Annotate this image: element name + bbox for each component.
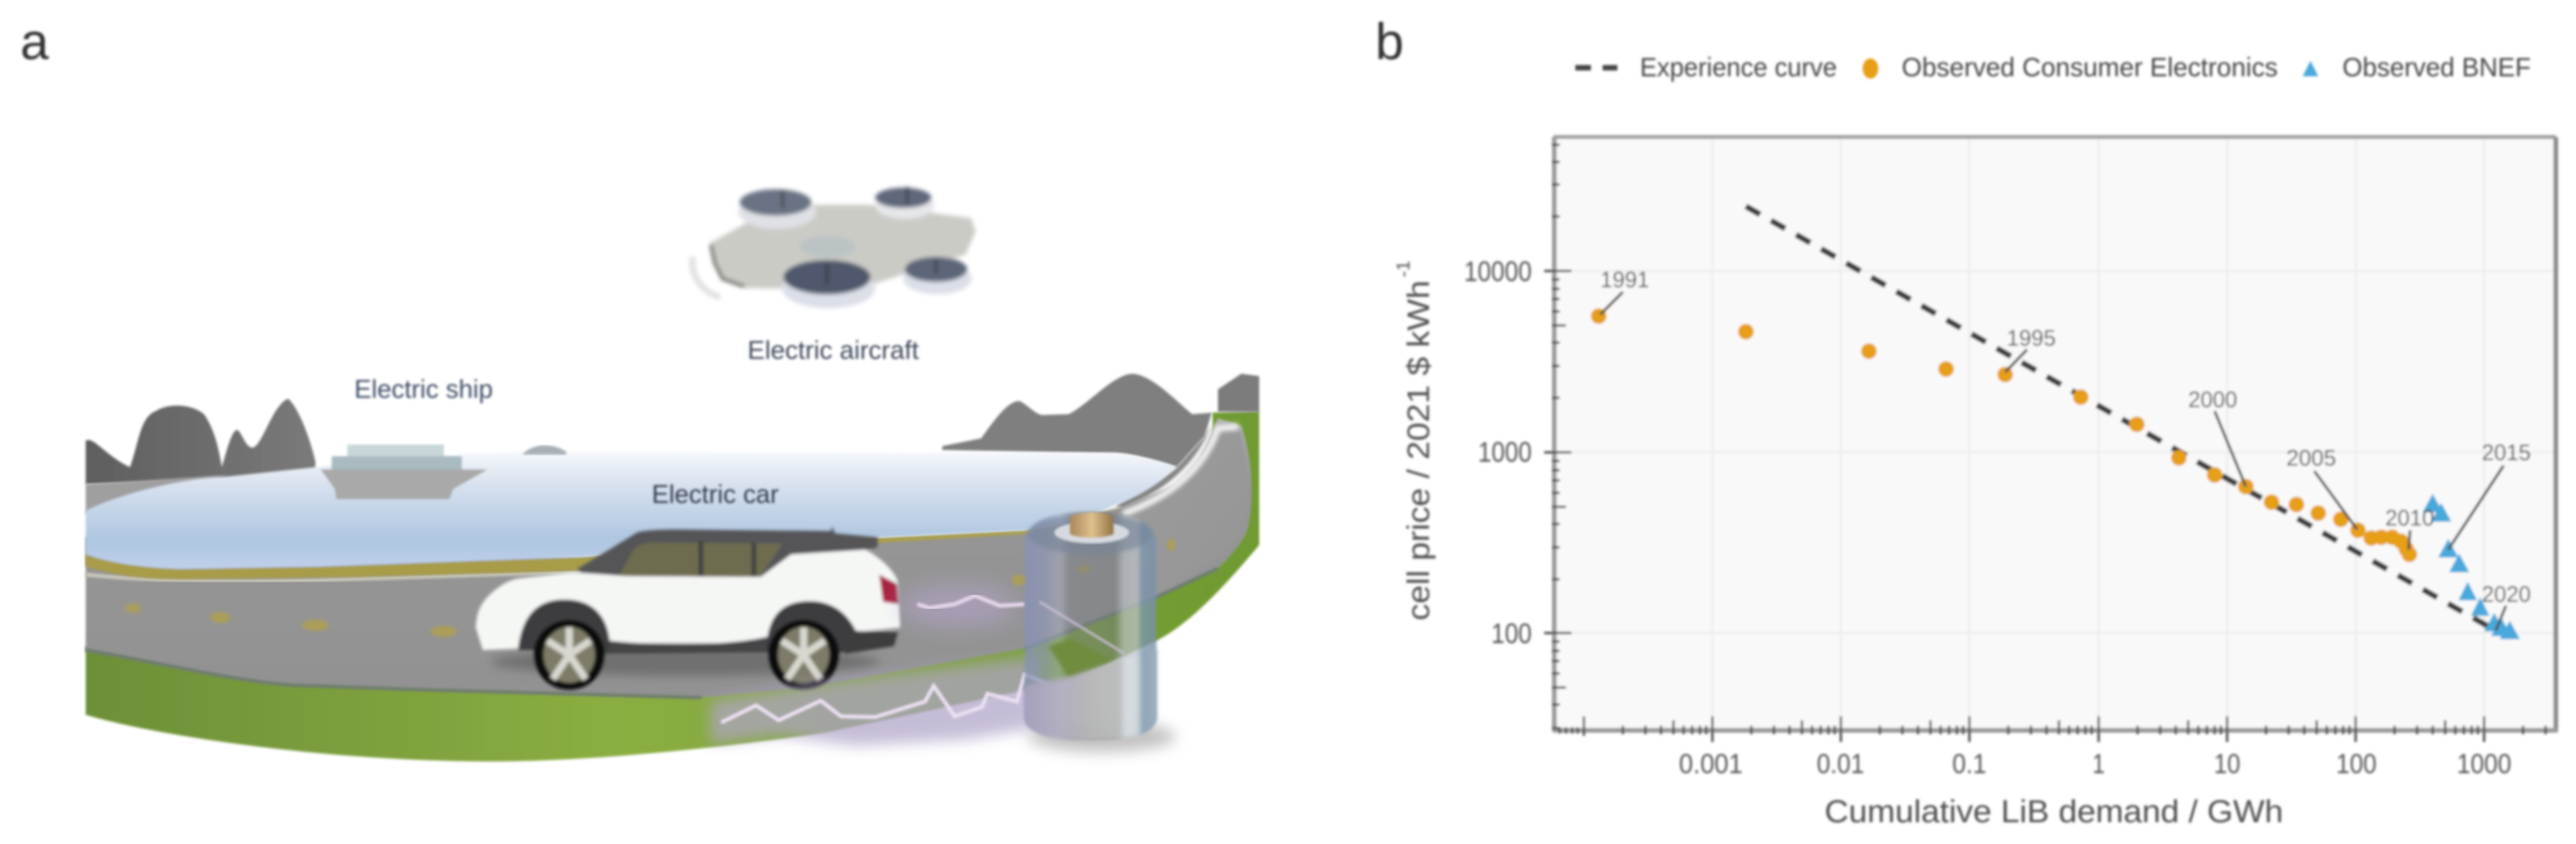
panel a: electric transport scene (86, 187, 1259, 761)
label: electric car: Electric car (652, 480, 779, 508)
internal spark line (1040, 602, 1125, 654)
rotors (738, 187, 972, 308)
battery cell (1025, 512, 1176, 752)
label: electric ship: Electric ship (354, 375, 493, 403)
year annotations: 2015 (2482, 441, 2531, 466)
tail light (879, 575, 899, 604)
battery terminal (1070, 512, 1114, 537)
legend (1575, 53, 2531, 83)
car roof (577, 526, 878, 580)
road (86, 418, 1251, 698)
wheel arches (518, 600, 610, 650)
year annotations (1600, 268, 2531, 631)
road far left edge (86, 475, 227, 514)
car body (476, 550, 900, 650)
x axis tick labels: 10 (2214, 749, 2240, 779)
y axis tick labels: 1000 (1478, 436, 1532, 468)
x axis tick labels: 1 (2092, 749, 2105, 779)
x axis tick labels: 1000 (2457, 749, 2511, 779)
front wheel (533, 620, 605, 690)
cabin (800, 236, 856, 258)
car windows (619, 543, 783, 578)
y axis tick labels: 10000 (1464, 255, 1532, 287)
car shadow (491, 648, 880, 676)
y axis tick labels (1464, 255, 1532, 649)
x axis title: Cumulative LiB demand / GWh (1825, 793, 2283, 829)
x axis tick labels (1679, 749, 2511, 779)
x axis tick labels: 100 (2336, 749, 2377, 779)
plot frame (1554, 137, 2557, 732)
lightning glow (710, 584, 1036, 746)
aircraft body (710, 205, 976, 290)
road highlight below shore (86, 571, 582, 582)
y axis title: cell price / 2021 $ kWh (1402, 280, 1436, 621)
battery shoulder (1028, 514, 1153, 554)
electric ship (321, 445, 487, 499)
electric aircraft (692, 187, 976, 308)
y axis tick labels: 100 (1491, 617, 1532, 649)
aircraft swoosh (692, 257, 720, 297)
olive shoreline (86, 506, 1125, 579)
rear bumper (845, 631, 898, 654)
legend: BNEF: Observed BNEF (2342, 53, 2531, 83)
lake (86, 452, 1177, 569)
dark inner kerb band (1115, 424, 1212, 508)
road edge highlight (1123, 427, 1238, 514)
legend: consumer electronics: Observed Consumer Electronics (1902, 53, 2278, 83)
year annotations: 2020 (2482, 582, 2531, 607)
experience curve line (1746, 206, 2496, 631)
legend: experience curve: Experience curve (1640, 53, 1837, 83)
green seen through battery (1048, 638, 1112, 676)
year annotations: 2005 (2286, 446, 2336, 471)
x axis ticks (1560, 716, 2546, 742)
plot background (1554, 137, 2556, 732)
y axis ticks (1544, 145, 1571, 728)
x axis tick labels: 0.1 (1952, 749, 1987, 779)
under body sill (604, 637, 771, 654)
upper lightning arc (917, 596, 1025, 608)
panel label b: b (1375, 12, 1404, 70)
BNEF points (2423, 494, 2520, 639)
battery shadow (1028, 721, 1176, 752)
consumer electronics points (1591, 308, 2417, 562)
road kerb shadow (86, 568, 1218, 698)
lower lightning arc (721, 674, 1054, 723)
window pillars (701, 541, 754, 578)
battery top ring (1054, 522, 1129, 543)
rear wheel (768, 620, 839, 690)
distant island (523, 445, 566, 455)
aircraft nose edge (711, 244, 744, 287)
road centre marks (125, 539, 1175, 637)
electric car (476, 526, 900, 690)
year annotations: 2000 (2188, 388, 2237, 413)
battery body (1025, 512, 1156, 740)
panel label a: a (20, 12, 49, 70)
x axis tick labels: 0.001 (1679, 749, 1743, 779)
right mountains (942, 374, 1212, 467)
panel b: experience curve chart (1393, 53, 2557, 829)
label: electric aircraft: Electric aircraft (748, 336, 919, 364)
year annotations: 1995 (2007, 326, 2056, 351)
battery lower part (1025, 649, 1156, 740)
year annotations: 1991 (1600, 268, 1649, 293)
left mountains (86, 399, 315, 484)
road right curve shading (1125, 424, 1249, 596)
grass verge (86, 411, 1259, 761)
year annotations: 2010 (2385, 506, 2434, 531)
y axis title: -1 (1393, 261, 1414, 277)
x axis tick labels: 0.01 (1817, 749, 1864, 779)
far right mountain (1218, 374, 1259, 412)
